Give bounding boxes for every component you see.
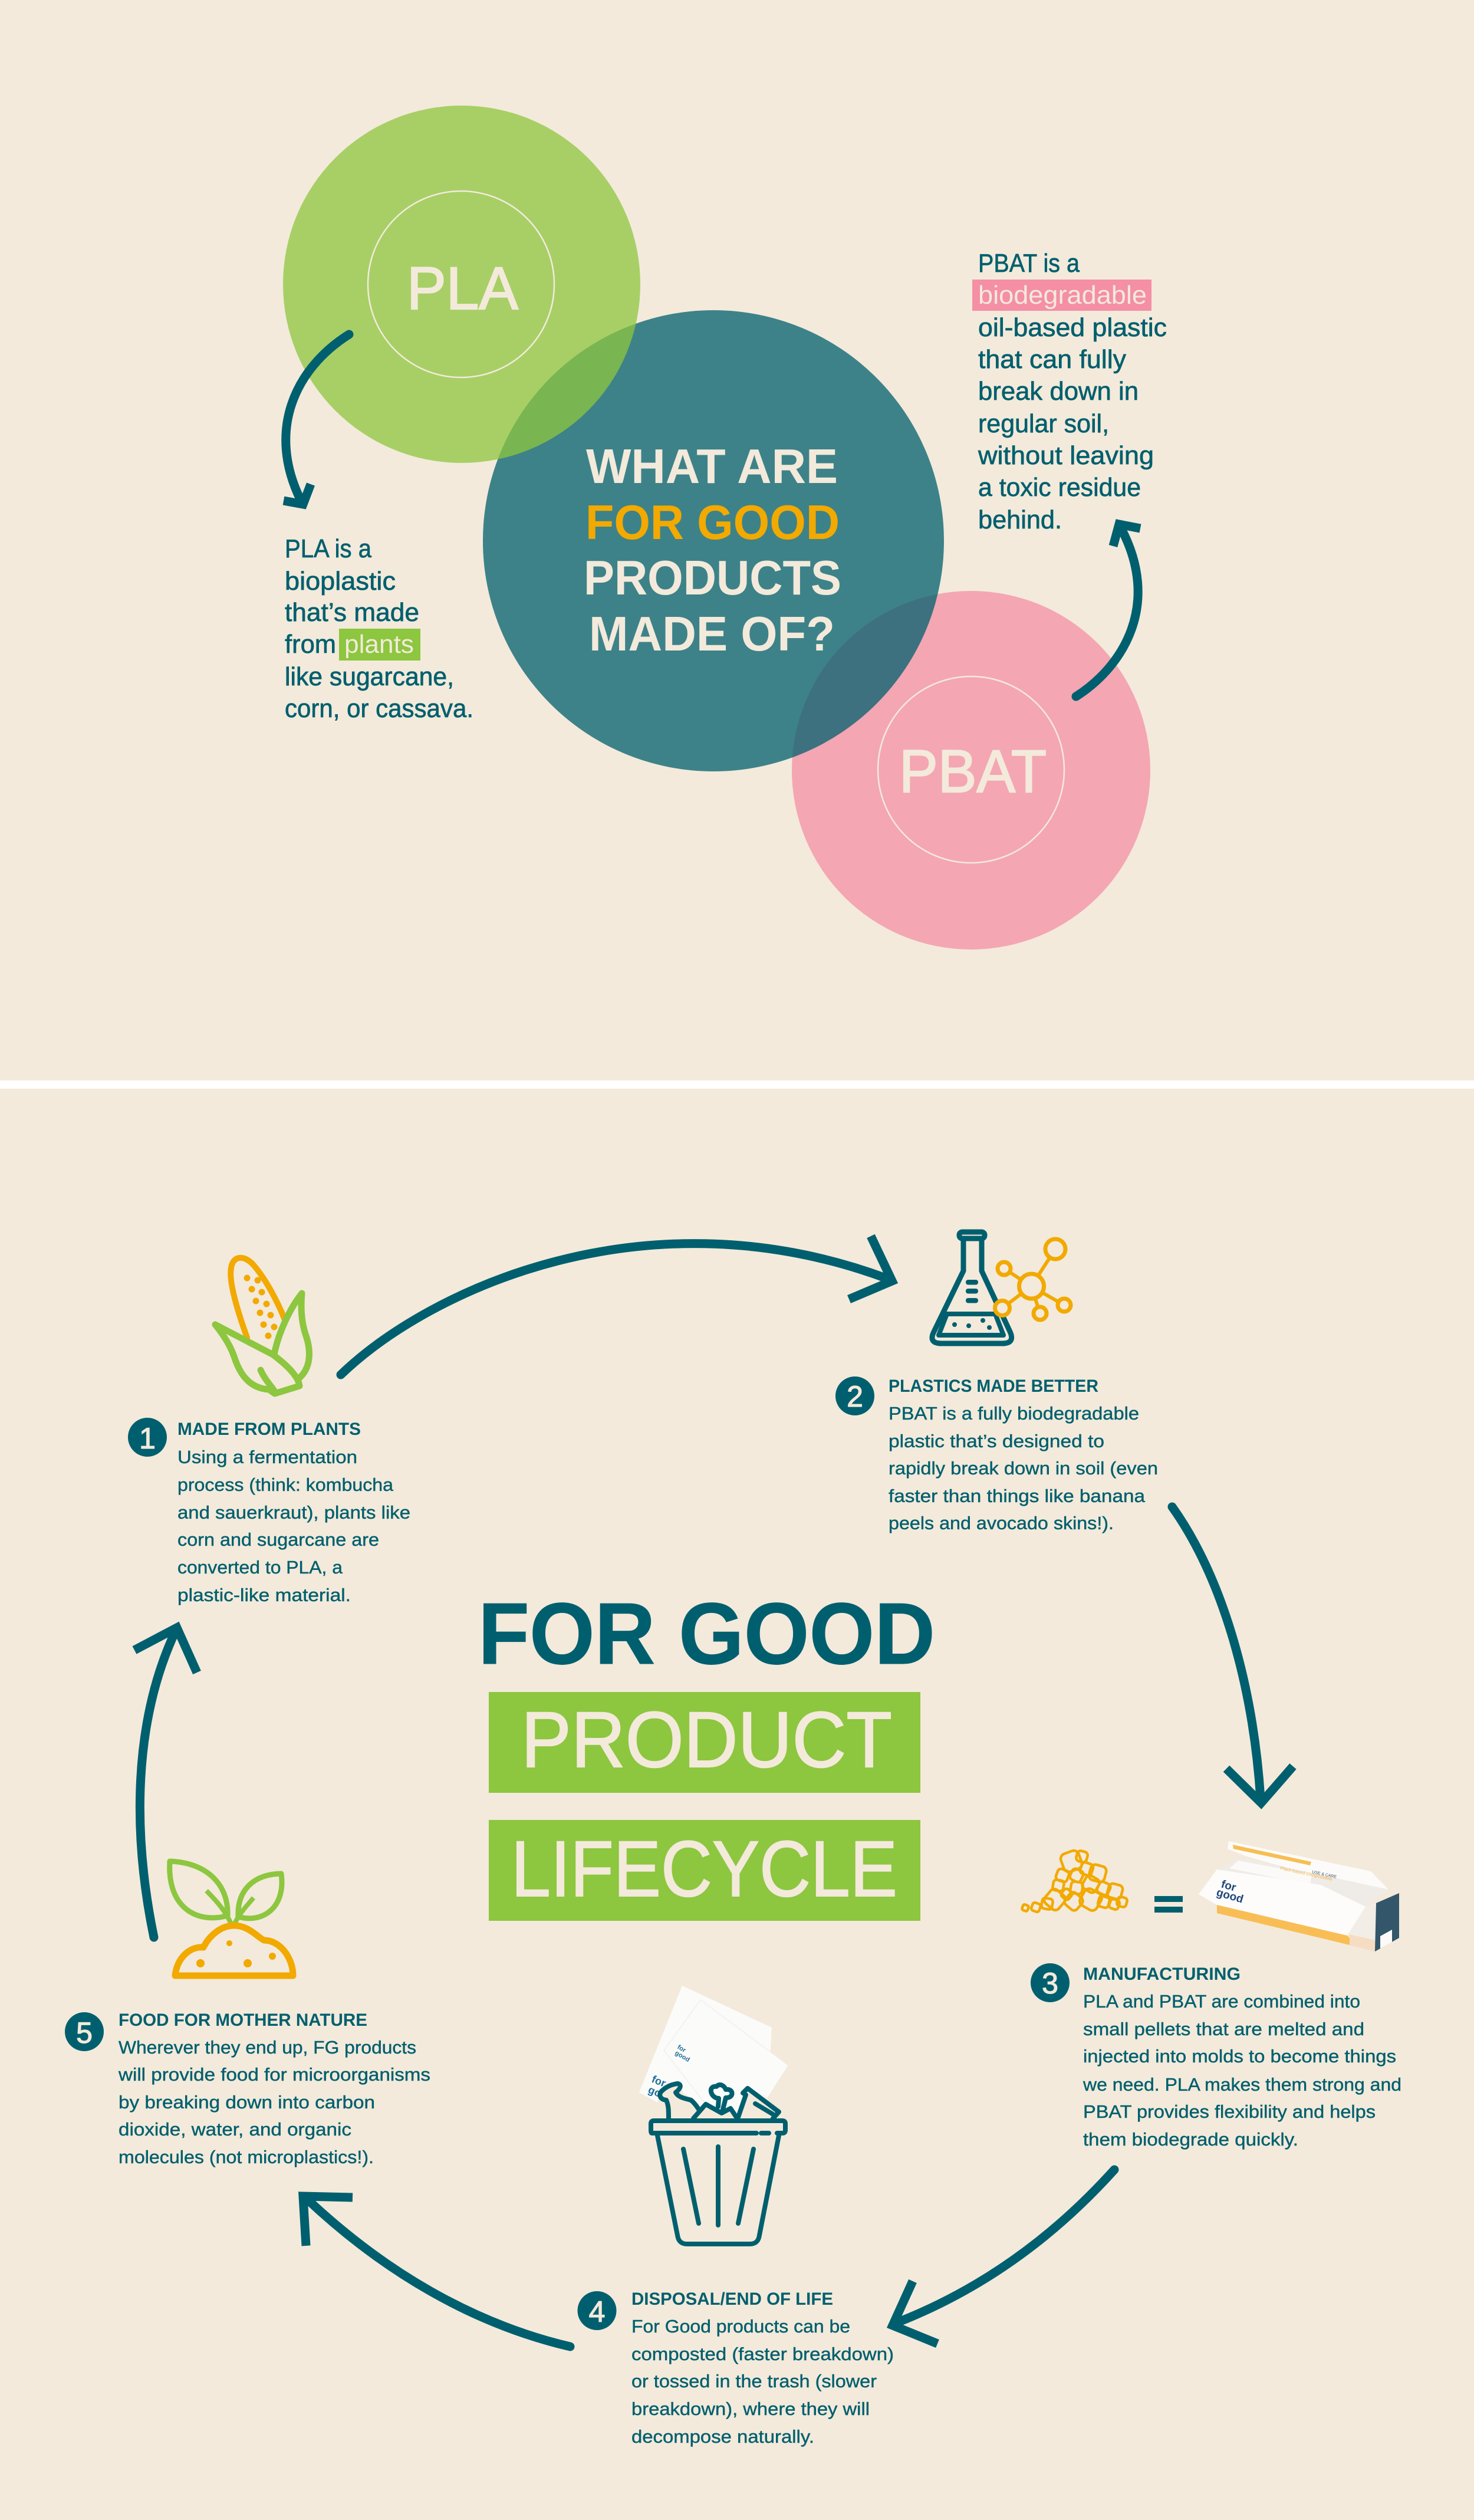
- arrow: step 2 to step 3: [1172, 1507, 1293, 1803]
- icon: pile of pellets: [1022, 1849, 1128, 1913]
- text: PLA description: [285, 534, 473, 723]
- step 1: made from plants: and sauerkraut), plants like: [177, 1502, 410, 1523]
- panel title: For Good product lifecycle: [478, 1585, 935, 1921]
- icon: equals sign: [1154, 1896, 1183, 1913]
- icon: trash bin with For Good bags: for: [650, 2073, 667, 2089]
- circle: PLA: PLA: [407, 255, 518, 322]
- step 2: plastics made better: PBAT is a fully biodegradable: [889, 1403, 1139, 1424]
- step 1: made from plants: [128, 1418, 410, 1605]
- step 5: food for mother nature: will provide food for microorganisms: [118, 2064, 430, 2085]
- icon: trash bin with For Good bags: good: [673, 2049, 691, 2064]
- step 5: food for mother nature: molecules (not microplastics!).: [119, 2147, 374, 2167]
- icon: trash bin with For Good bags: for: [676, 2043, 687, 2054]
- step 3: manufacturing: PBAT provides flexibility and helps: [1083, 2101, 1376, 2122]
- icon: flask and molecule: [932, 1232, 1071, 1343]
- step 3: manufacturing: them biodegrade quickly.: [1083, 2129, 1298, 2150]
- step 4: disposal / end of life: breakdown), where they will: [631, 2399, 870, 2419]
- text: PBAT description: a toxic residue: [978, 473, 1141, 502]
- step 3: manufacturing: injected into molds to become things: [1083, 2046, 1396, 2066]
- text: PLA description: bioplastic: [285, 567, 396, 596]
- text: PBAT description: [972, 249, 1167, 534]
- circle: PBAT: PBAT: [899, 738, 1047, 805]
- step 2: plastics made better: rapidly break down in soil (even: [889, 1458, 1158, 1479]
- text: PBAT description: PBAT is a: [978, 249, 1080, 278]
- icon: seedling in soil: [170, 1861, 293, 1976]
- step 2: plastics made better: peels and avocado skins!).: [889, 1513, 1114, 1533]
- text: PBAT description: behind.: [978, 505, 1062, 534]
- step 3: manufacturing: PLA and PBAT are combined into: [1083, 1991, 1360, 2012]
- step 1: made from plants: corn and sugarcane are: [177, 1529, 379, 1550]
- step 5: food for mother nature: 5: [76, 2016, 93, 2049]
- icon: corn: [215, 1258, 309, 1394]
- step 4: disposal / end of life: decompose naturally.: [631, 2426, 814, 2447]
- step 3: manufacturing: 3: [1042, 1967, 1058, 2000]
- arrow: step 4 to step 5: [303, 2196, 570, 2347]
- text: PLA description: plants: [344, 630, 414, 659]
- step 3: manufacturing: MANUFACTURING: [1083, 1964, 1241, 1984]
- step 3: manufacturing: we need. PLA makes them strong and: [1083, 2074, 1401, 2095]
- product photo: open For Good box: for: [1220, 1878, 1238, 1894]
- step 3: manufacturing: [1031, 1963, 1401, 2150]
- circle: title: [483, 310, 944, 771]
- circle: title: MADE OF?: [589, 606, 835, 661]
- text: PBAT description: biodegradable: [978, 281, 1147, 310]
- panel title: For Good product lifecycle: LIFECYCLE: [511, 1825, 897, 1913]
- text: PLA description: from: [285, 630, 336, 659]
- text: PBAT description: that can fully: [978, 345, 1126, 374]
- product photo: open For Good box: [1199, 1841, 1399, 1951]
- step 4: disposal / end of life: or tossed in the trash (slower: [631, 2371, 877, 2391]
- arrow: PBAT to description: [1076, 524, 1140, 696]
- circle: title: WHAT ARE: [586, 439, 838, 494]
- step 5: food for mother nature: dioxide, water, and organic: [119, 2119, 351, 2140]
- step 4: disposal / end of life: For Good products can be: [631, 2316, 850, 2337]
- product photo: open For Good box: USE & CARE: [1312, 1870, 1337, 1880]
- text: PBAT description: break down in: [978, 377, 1139, 406]
- icon: trash bin with For Good bags: [639, 1986, 788, 2244]
- step 1: made from plants: plastic-like material.: [177, 1585, 351, 1605]
- step 1: made from plants: MADE FROM PLANTS: [177, 1420, 361, 1439]
- product photo: open For Good box: good: [1215, 1887, 1245, 1906]
- arrow: step 1 to step 2: [341, 1236, 892, 1375]
- icon: trash bin with For Good bags: go: [647, 2084, 663, 2100]
- text: PLA description: PLA is a: [285, 534, 371, 563]
- arrow: PLA to description: [284, 334, 349, 504]
- step 4: disposal / end of life: composted (faster breakdown): [631, 2344, 894, 2364]
- step 2: plastics made better: [835, 1376, 1158, 1533]
- step 5: food for mother nature: Wherever they end up, FG products: [119, 2037, 416, 2058]
- step 1: made from plants: converted to PLA, a: [177, 1557, 343, 1578]
- text: PLA description: that’s made: [285, 598, 419, 627]
- arrow: step 5 to step 1: [134, 1628, 197, 1937]
- step 3: manufacturing: small pellets that are melted and: [1083, 2019, 1364, 2039]
- step 2: plastics made better: faster than things like banana: [889, 1486, 1146, 1506]
- step 5: food for mother nature: by breaking down into carbon: [119, 2092, 375, 2112]
- text: PLA description: corn, or cassava.: [285, 694, 473, 723]
- circle: PBAT: [792, 591, 1150, 949]
- text: PBAT description: oil-based plastic: [978, 313, 1167, 342]
- panel title: For Good product lifecycle: PRODUCT: [521, 1696, 892, 1784]
- text: PBAT description: without leaving: [978, 441, 1154, 470]
- panel title: For Good product lifecycle: FOR GOOD: [478, 1585, 935, 1683]
- arrow: step 3 to step 4: [893, 2170, 1114, 2344]
- step 4: disposal / end of life: DISPOSAL/END OF LIFE: [631, 2289, 833, 2309]
- text: PLA description: like sugarcane,: [285, 662, 454, 691]
- step 2: plastics made better: 2: [847, 1380, 863, 1413]
- step 5: food for mother nature: FOOD FOR MOTHER NATURE: [119, 2010, 367, 2030]
- step 2: plastics made better: plastic that’s designed to: [889, 1431, 1104, 1451]
- product photo: open For Good box: Plant-based compostable: [1280, 1865, 1333, 1882]
- circle: title: FOR GOOD: [585, 495, 840, 550]
- step 1: made from plants: Using a fermentation: [177, 1447, 357, 1467]
- step 4: disposal / end of life: [578, 2289, 894, 2447]
- circle: title: PRODUCTS: [584, 550, 841, 605]
- text: PBAT description: regular soil,: [978, 409, 1109, 438]
- step 5: food for mother nature: [65, 2010, 430, 2167]
- step 1: made from plants: 1: [139, 1422, 156, 1455]
- step 2: plastics made better: PLASTICS MADE BETTER: [889, 1376, 1098, 1396]
- circle: PLA: [283, 106, 640, 463]
- step 4: disposal / end of life: 4: [589, 2295, 605, 2328]
- step 1: made from plants: process (think: kombucha: [177, 1474, 394, 1495]
